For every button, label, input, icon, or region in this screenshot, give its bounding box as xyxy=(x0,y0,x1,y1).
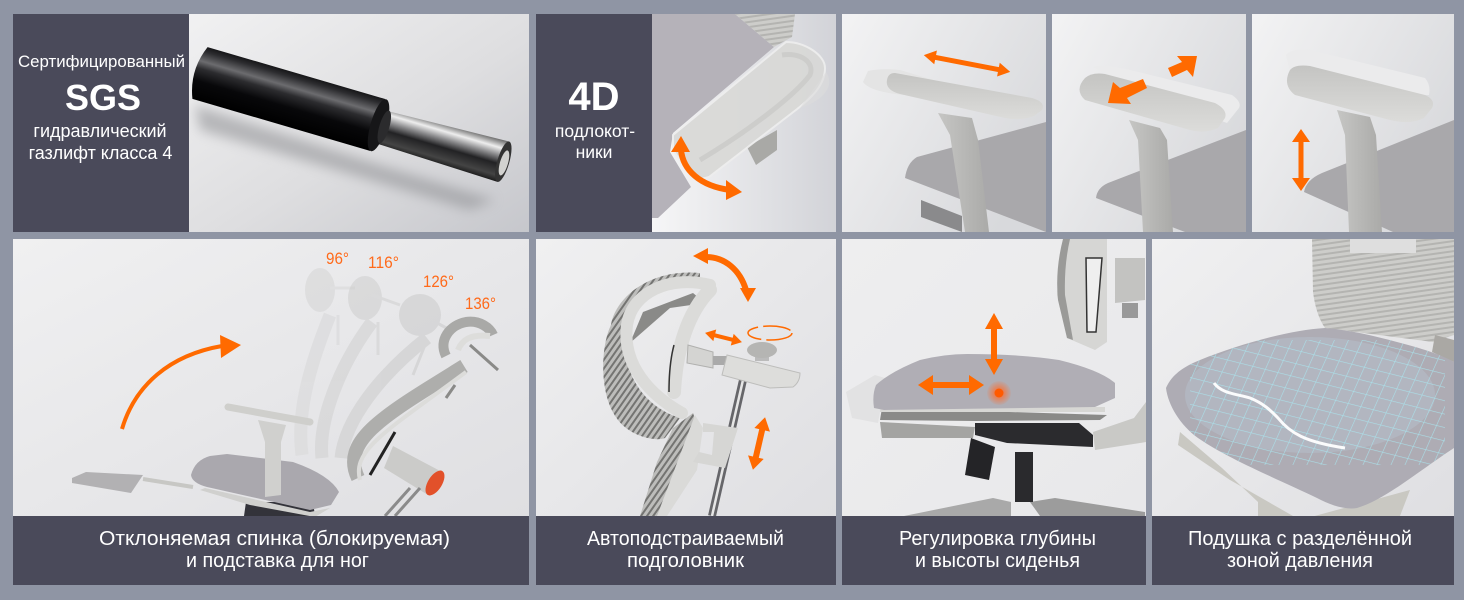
arrow: backward xyxy=(1108,79,1147,104)
panel: 4D armrests xyxy=(536,14,836,232)
knob xyxy=(965,438,995,480)
image: seat depth xyxy=(842,239,1146,516)
text block: SGS certification: газлифт класса 4 xyxy=(29,143,172,163)
arrow: forward xyxy=(1168,56,1197,77)
panel: cushion xyxy=(1152,239,1454,585)
ghost backrest 116 xyxy=(322,276,400,458)
caption: и высоты сиденья xyxy=(915,550,1080,572)
caption: Автоподстраиваемый xyxy=(587,528,784,550)
bracket arm xyxy=(687,342,800,388)
image: headrest xyxy=(536,239,836,516)
seat plate xyxy=(880,407,1107,438)
arrow: height xyxy=(745,415,773,472)
seat xyxy=(191,454,339,510)
angle labels xyxy=(326,252,496,309)
caption: зоной давления xyxy=(1227,550,1373,572)
panel: headrest xyxy=(536,239,836,585)
ghost pad xyxy=(1378,69,1430,95)
text block: 4D: подлокот- xyxy=(555,121,635,141)
caption: и подставка для ног xyxy=(186,550,369,572)
clamp xyxy=(693,423,738,468)
ghost pad xyxy=(1169,81,1240,123)
panel: armrest forward xyxy=(1052,14,1246,232)
wave highlight xyxy=(1214,383,1345,448)
ghost backrest 96 xyxy=(301,268,355,455)
angle labels: 116° xyxy=(368,253,399,272)
seat xyxy=(1304,120,1454,232)
ghost backrest 126 xyxy=(341,294,450,458)
headrest frame xyxy=(626,282,710,413)
arrow: left-right xyxy=(924,50,1010,76)
panel: armrest height xyxy=(1252,14,1454,232)
lumbar cylinder xyxy=(384,446,448,516)
text block: SGS certification: Сертифицированный xyxy=(18,52,185,71)
angle labels: 136° xyxy=(465,294,496,313)
armrest pad xyxy=(1080,74,1226,132)
arrow: up-down xyxy=(1292,129,1310,191)
armrest post xyxy=(1129,120,1173,232)
armrest pad xyxy=(887,73,1043,119)
text block: SGS certification xyxy=(13,14,189,232)
ghost pad xyxy=(864,70,901,92)
panel: armrest slide xyxy=(842,14,1046,232)
panel: seat depth xyxy=(842,239,1146,585)
armrest pad xyxy=(1287,66,1433,122)
caption: подголовник xyxy=(627,550,744,572)
headrest mesh xyxy=(603,272,700,439)
caption xyxy=(536,516,836,585)
angle labels: 96° xyxy=(326,249,349,268)
lower backrest xyxy=(640,413,703,516)
image: reclining chair xyxy=(13,239,529,517)
text block: 4D: 4D xyxy=(568,75,620,119)
cushion xyxy=(873,354,1115,410)
headrest xyxy=(1057,239,1145,350)
pressure dot xyxy=(987,381,1011,405)
mechanism xyxy=(975,423,1093,447)
ghost seat xyxy=(846,375,885,423)
armrest xyxy=(228,407,310,497)
armrest post xyxy=(938,113,989,232)
panel: reclining backrest xyxy=(13,239,529,585)
base xyxy=(904,452,1145,516)
caption: Отклоняемая спинка (блокируемая) xyxy=(99,528,450,550)
mesh back xyxy=(1312,239,1454,342)
rod xyxy=(712,380,743,516)
arrow: depth xyxy=(704,327,743,348)
footrest xyxy=(72,472,193,493)
armrest post xyxy=(1337,110,1382,232)
backrest 136 xyxy=(354,322,498,480)
dark mechanism xyxy=(244,502,315,516)
seat xyxy=(1096,130,1246,232)
caption: Регулировка глубины xyxy=(899,528,1096,550)
arrow: tilt xyxy=(693,248,756,302)
text block: SGS certification: гидравлический xyxy=(33,121,167,141)
backrest arm xyxy=(1093,402,1146,450)
cushion xyxy=(1166,328,1454,508)
caption xyxy=(1152,516,1454,585)
caption xyxy=(13,516,529,585)
image: cushion xyxy=(1152,239,1454,520)
arrow: rotate xyxy=(748,326,792,340)
arrow: rotation xyxy=(671,136,742,200)
image: gas lift cylinder xyxy=(187,14,529,232)
text block: 4D: ники xyxy=(576,142,612,162)
image: armrest rotation xyxy=(652,14,836,232)
arrow: recline xyxy=(122,335,241,429)
text block: SGS certification: SGS xyxy=(65,77,141,118)
panel: SGS gas lift xyxy=(13,14,529,232)
arrow: height xyxy=(985,313,1003,375)
seat base xyxy=(921,200,962,232)
text block: 4D xyxy=(536,14,652,232)
seat xyxy=(905,122,1046,232)
angle labels: 126° xyxy=(423,272,454,291)
caption xyxy=(842,516,1146,585)
caption: Подушка с разделённой xyxy=(1188,528,1412,550)
under-seat tray xyxy=(1178,432,1410,520)
arrow: depth xyxy=(918,375,984,395)
pressure grid xyxy=(1185,337,1445,465)
